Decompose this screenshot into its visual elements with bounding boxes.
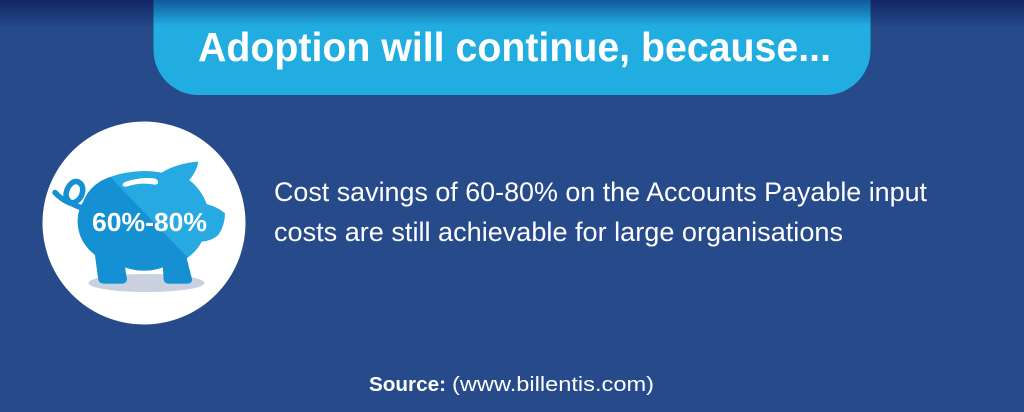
title banner: [154, 0, 870, 95]
icon: piggy bank in white circle: [42, 122, 246, 324]
body text: costs are still achievable for large organisations: [274, 217, 843, 247]
body text: [274, 177, 928, 247]
source line: [369, 374, 654, 396]
title: Adoption will continue, because...: [198, 24, 831, 70]
source line: Source:: [369, 374, 446, 396]
body text: Cost savings of 60-80% on the Accounts Payable input: [274, 177, 928, 207]
source line: (www.billentis.com): [452, 374, 654, 396]
icon label: 60%-80%: [92, 207, 207, 237]
